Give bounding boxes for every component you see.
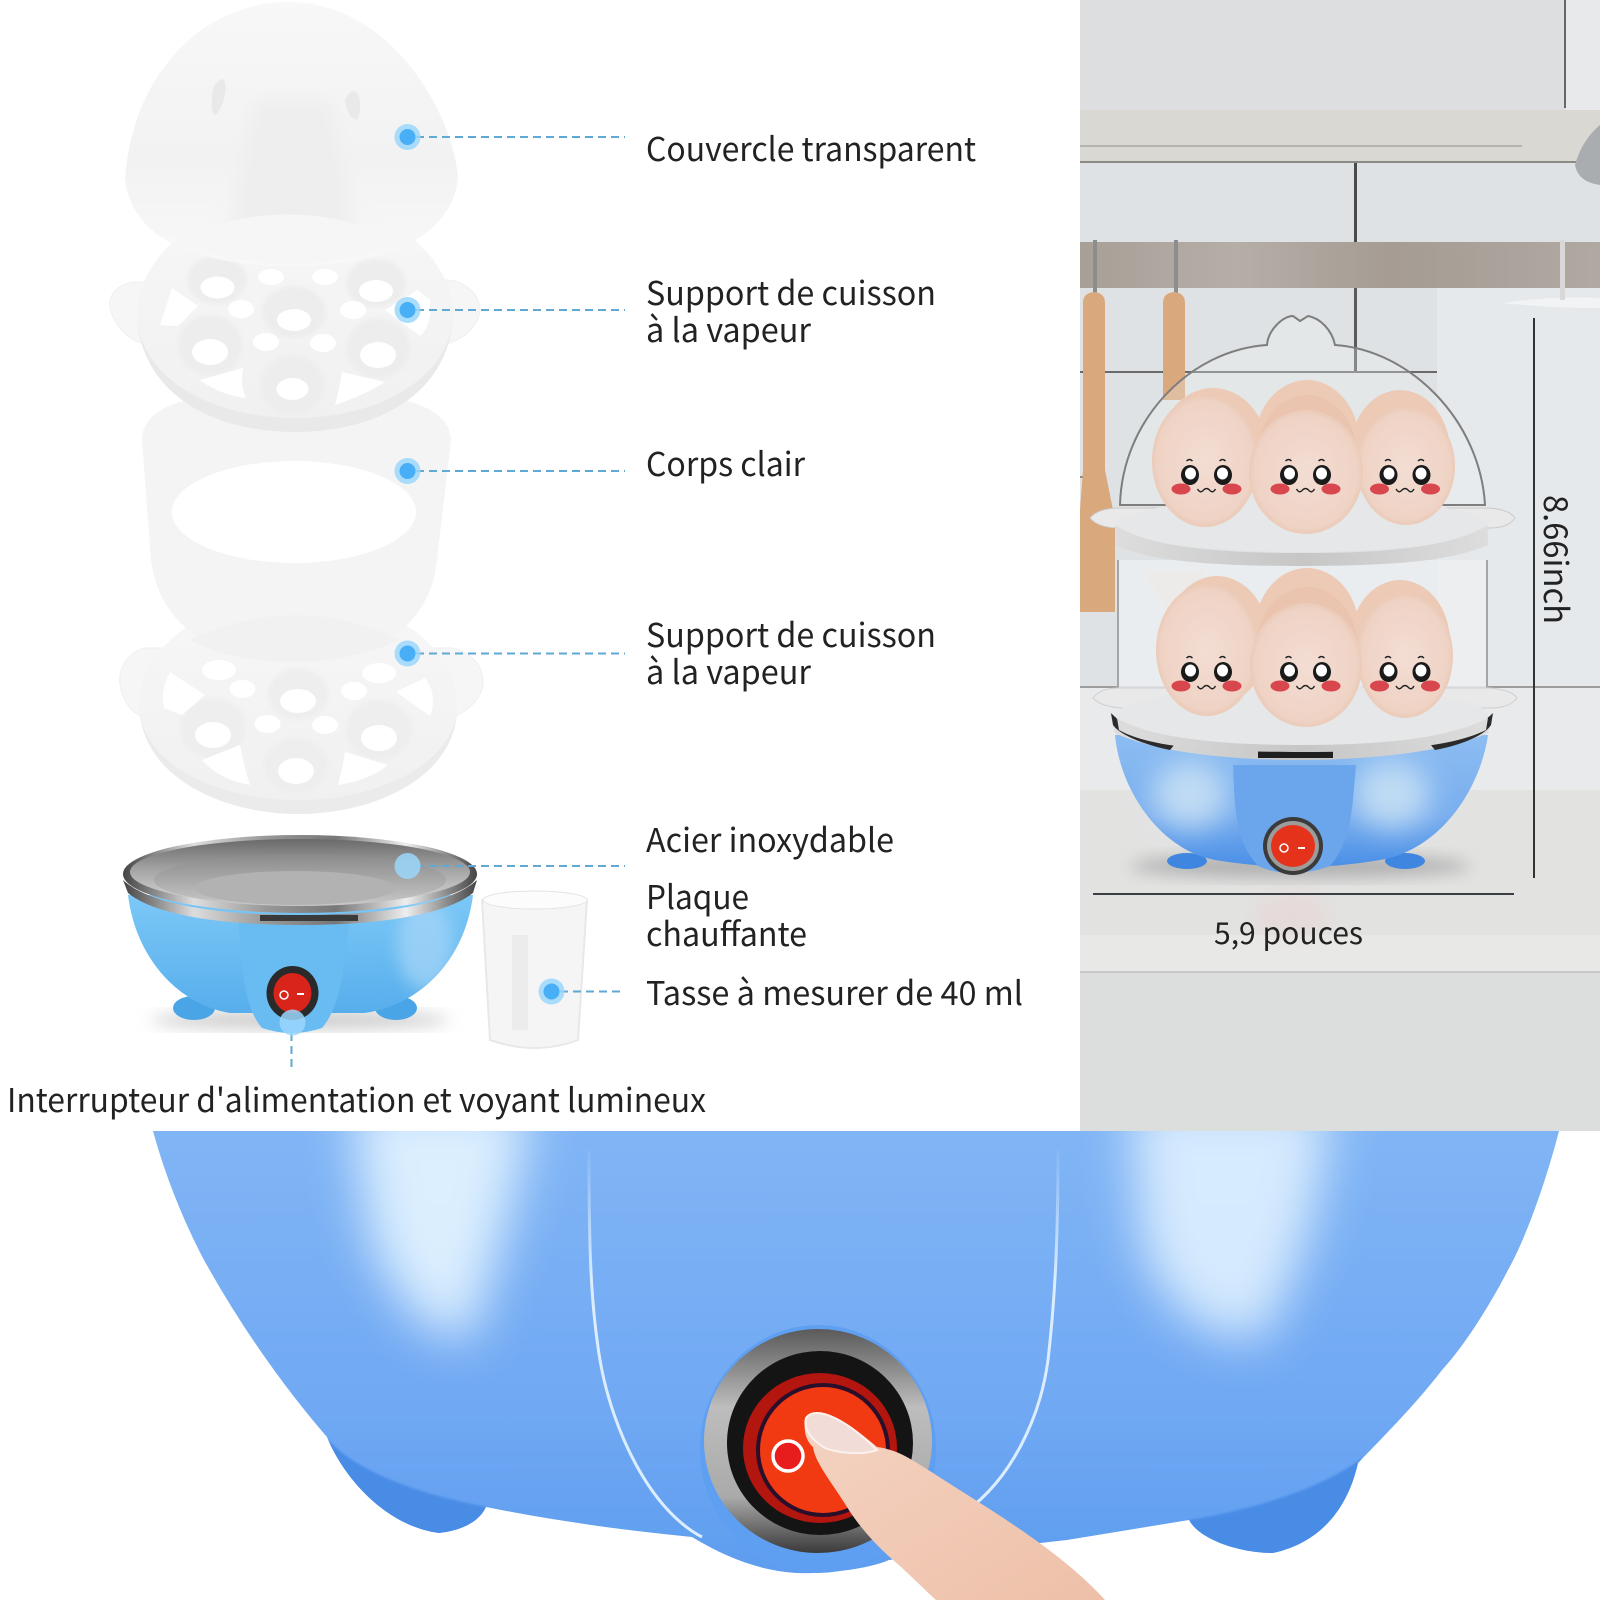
label: stainless steel: Acier inoxydable: [646, 814, 894, 862]
close-up bowl: [153, 1131, 1559, 1574]
panel: exploded parts diagram: [110, 2, 587, 1048]
base with stainless plate: [123, 835, 477, 1033]
upper tray: [1090, 498, 1515, 566]
assembled egg cooker: [1090, 316, 1517, 878]
label: transparent lid: Couvercle transparent: [646, 123, 976, 171]
cooker shadow: [1130, 854, 1470, 878]
label: upper steam rack: [646, 267, 936, 352]
label: clear body: Corps clair: [646, 438, 805, 486]
cooker switch: [1263, 817, 1323, 875]
height dimension line: [1533, 318, 1535, 878]
panel: kitchen scene with assembled cooker: [1080, 0, 1600, 1131]
upper eggs: [1152, 380, 1455, 534]
close-up ridges: [589, 1150, 1058, 1537]
label: power switch and indicator: Interrupteur d'alimentation et voyant lumineux: [7, 1074, 706, 1122]
steamer tray upper: [110, 200, 480, 432]
label: measuring cup: Tasse à mesurer de 40 ml: [646, 967, 1023, 1015]
clear middle body: [1118, 560, 1487, 705]
label: width: 5,9 pouces: [1214, 909, 1363, 953]
callout markers and dashed leader lines: [280, 124, 625, 1072]
label: lower steam rack: à la vapeur: [646, 646, 811, 694]
label: upper steam rack: Support de cuisson: [646, 267, 936, 315]
lower eggs: [1156, 568, 1453, 727]
label: upper steam rack: à la vapeur: [646, 304, 811, 352]
close-up highlights: [350, 1100, 1330, 1340]
measuring cup: [482, 891, 587, 1048]
label: heating plate: Plaque: [646, 871, 749, 919]
panel: close-up of power switch: [153, 1131, 1559, 1600]
wooden spatulas: [1080, 240, 1205, 622]
close-up feet: [324, 1434, 1362, 1553]
label: lower steam rack: [646, 609, 936, 694]
close-up switch: [700, 1325, 936, 1573]
steamer tray lower: [120, 596, 483, 814]
lower tray: [1093, 686, 1517, 752]
power switch small: [266, 966, 318, 1020]
label: lower steam rack: Support de cuisson: [646, 609, 936, 657]
transparent lid: [125, 2, 458, 266]
cooker base: [1110, 713, 1493, 873]
kitchen background: [1080, 0, 1600, 1131]
label: heating plate: chauffante: [646, 908, 807, 956]
dome lid: [1120, 316, 1485, 505]
label: heating plate: [646, 871, 807, 956]
width dimension line: [1093, 893, 1514, 895]
label: height: 8.66inch: [1534, 495, 1582, 624]
clear body ring: [142, 396, 451, 662]
pressing finger: [805, 1412, 1105, 1600]
